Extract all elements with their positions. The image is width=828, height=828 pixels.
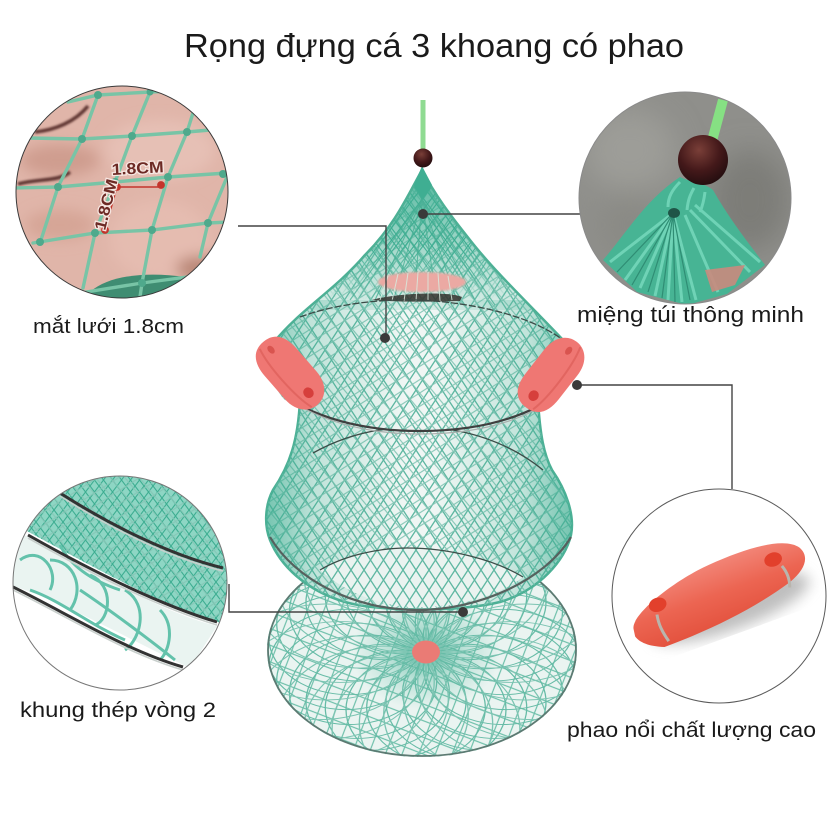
label: mesh size: mắt lưới 1.8cm	[33, 315, 184, 338]
measurement labels: 1.8CM	[111, 159, 164, 179]
pink float through net	[705, 265, 745, 292]
net funnel threads	[350, 200, 495, 305]
fan threads	[610, 182, 760, 302]
panel: steel frame circle	[10, 470, 235, 695]
pink inner hub	[378, 272, 466, 292]
panel: float circle	[612, 489, 826, 703]
net threads	[15, 90, 230, 297]
float shadow	[644, 559, 816, 657]
frame arcs	[13, 493, 223, 670]
fish trap net illustration	[256, 100, 584, 757]
bottom hub disc	[412, 640, 440, 664]
rope and knot	[414, 100, 432, 200]
cone silhouette	[274, 170, 563, 342]
label: float: phao nổi chất lượng cao	[567, 719, 816, 742]
bottom mesh disc	[267, 582, 577, 757]
net knots	[36, 88, 227, 287]
title: Rọng đựng cá 3 khoang có phao	[184, 27, 684, 64]
lower opening	[320, 548, 523, 607]
wooden bead	[678, 135, 728, 185]
callout line: mesh size	[238, 226, 386, 338]
skin shading	[20, 124, 210, 276]
right float	[509, 329, 593, 420]
dense net above frame	[27, 476, 226, 622]
darker thread gaps	[617, 213, 690, 302]
upper cone mesh	[276, 170, 563, 435]
middle mesh section	[266, 400, 572, 610]
label: smart mouth: miệng túi thông minh	[577, 302, 804, 327]
orange float	[620, 532, 818, 655]
callout dots	[380, 209, 582, 617]
sparse net below frame	[10, 530, 217, 668]
callout line: smart mouth	[423, 213, 580, 215]
red measure marks	[102, 182, 164, 233]
panel: mesh size circle	[16, 86, 228, 298]
callout line: float	[577, 385, 732, 489]
callout line: steel frame	[229, 584, 463, 612]
net fan	[603, 177, 765, 305]
panel: mesh size circle: 1.8CM	[92, 177, 121, 232]
finger creases	[18, 106, 88, 184]
callout lines	[229, 214, 732, 612]
left float	[247, 328, 333, 418]
label: steel frame: khung thép vòng 2	[20, 699, 216, 722]
mouth hole	[668, 208, 680, 218]
panel: smart mouth circle	[575, 90, 800, 310]
rope	[712, 100, 723, 141]
